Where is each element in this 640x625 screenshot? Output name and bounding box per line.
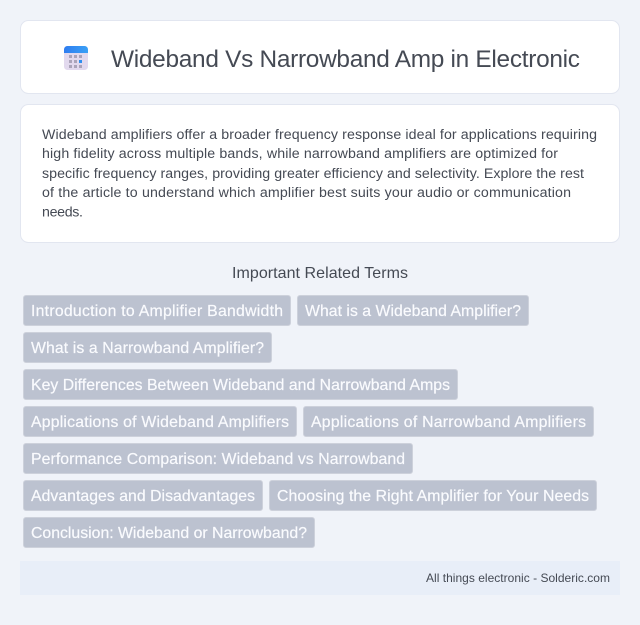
intro paragraph: needs.: [42, 204, 83, 220]
tag: advantages: [24, 480, 262, 510]
tag: key differences: [24, 370, 458, 400]
tag: introduction: Introduction to Amplifier Bandwidth: [31, 303, 283, 320]
tag: wideband amplifier: [298, 296, 528, 326]
tag: performance comparison: [24, 444, 412, 474]
tag list: [24, 296, 596, 548]
icon: calendar grid: [64, 46, 88, 70]
tag: wideband applications: [24, 406, 296, 436]
header panel: [20, 20, 620, 94]
tag: conclusion: Conclusion: Wideband or Narrowband?: [31, 525, 307, 542]
footer: All things electronic - Solderic.com: [426, 571, 610, 585]
tag: introduction: [24, 296, 290, 326]
tag: choosing: [270, 480, 596, 510]
intro paragraph: high fidelity across multiple bands, while narrowband amplifiers are optimized for: [42, 146, 558, 162]
intro paragraph: specific frequency ranges, providing greater efficiency and selectivity. Explore the rest: [42, 166, 584, 182]
tag: wideband applications: Applications of Wideband Amplifiers: [31, 414, 289, 431]
tag: choosing: Choosing the Right Amplifier for Your Needs: [277, 488, 589, 505]
tag: performance comparison: Performance Comparison: Wideband vs Narrowband: [31, 451, 405, 468]
panel: intro text: [20, 104, 620, 242]
intro paragraph: [42, 127, 597, 220]
tag: conclusion: [24, 518, 314, 548]
heading: important related terms: Important Related Terms: [232, 265, 408, 282]
intro paragraph: Wideband amplifiers offer a broader frequency response ideal for applications requiring: [42, 127, 597, 143]
tag: narrowband applications: Applications of Narrowband Amplifiers: [311, 414, 586, 431]
intro paragraph: of the article to understand which amplifier best suits your audio or communication: [42, 185, 571, 201]
tag: key differences: Key Differences Between Wideband and Narrowband Amps: [31, 377, 450, 394]
tag: narrowband amplifier: What is a Narrowband Amplifier?: [31, 340, 264, 357]
footer: [20, 561, 620, 595]
title: Wideband Vs Narrowband Amp in Electronic: [111, 46, 580, 73]
tag: narrowband applications: [304, 406, 594, 436]
tag: wideband amplifier: What is a Wideband Amplifier?: [305, 303, 521, 320]
tag: advantages: Advantages and Disadvantages: [31, 488, 255, 505]
tag: narrowband amplifier: [24, 332, 272, 362]
